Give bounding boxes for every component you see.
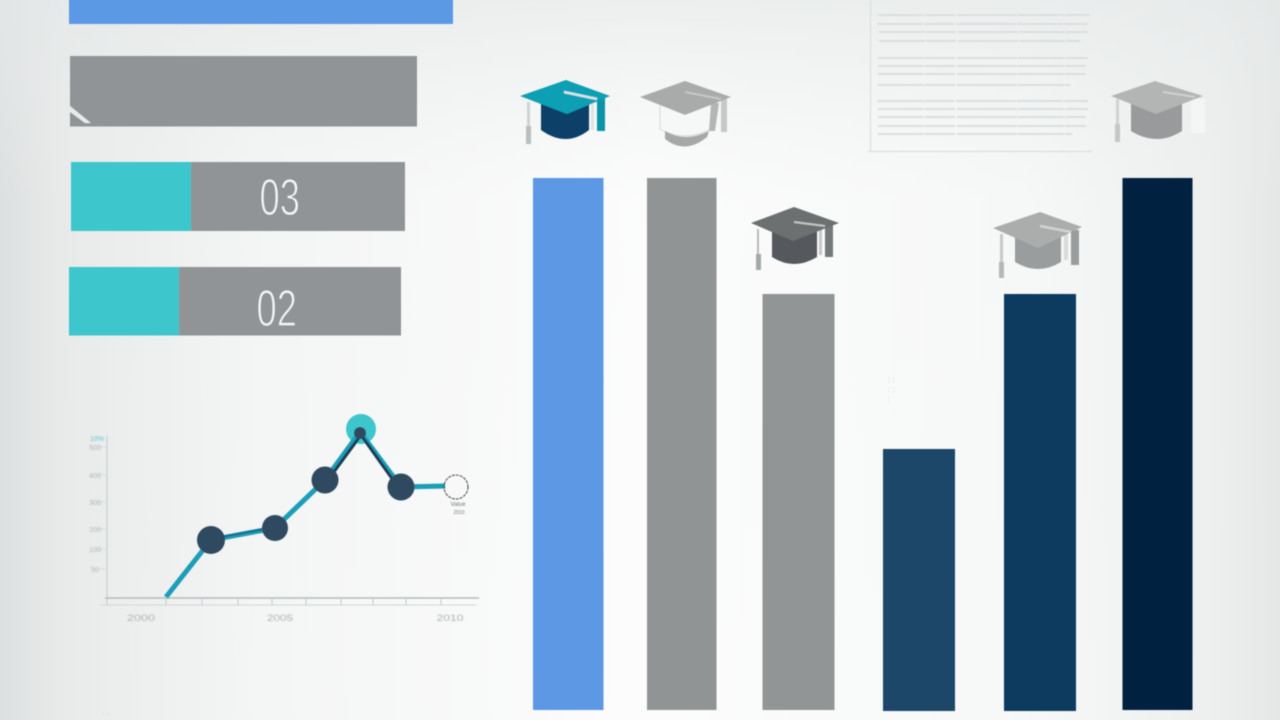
body copy lines: [877, 15, 1090, 134]
bar 02: 02: [256, 278, 297, 338]
trend line: [166, 432, 445, 597]
bar 03: [71, 162, 405, 231]
small faint marks: [102, 375, 895, 719]
bar 5: [1004, 294, 1076, 711]
end marker: 2010: [453, 510, 465, 516]
small faint marks: : :: [888, 375, 895, 384]
bar 6: [1122, 178, 1192, 710]
icon: graduation cap mid grey: [993, 212, 1082, 278]
axis labels: 200: [89, 527, 101, 534]
axis labels: 100: [89, 547, 101, 554]
small faint marks: · ·: [102, 710, 110, 719]
axis labels: 400: [89, 473, 101, 480]
axis labels: 500: [89, 445, 101, 452]
icon: graduation cap dark grey: [751, 207, 839, 270]
icon: graduation cap teal: [520, 80, 610, 144]
axis labels: 2005: [267, 613, 293, 623]
bar 2: [647, 178, 716, 710]
bar 02: [69, 267, 401, 338]
bar 4: [883, 449, 955, 711]
small faint marks: : :: [888, 385, 895, 394]
bar 03: 03: [260, 167, 300, 227]
axis labels: [89, 436, 464, 623]
end marker: Value: [451, 502, 466, 508]
grey bar: [70, 56, 417, 126]
icon: graduation cap pale grey: [1111, 81, 1205, 142]
panel: horizontal bars: [69, 0, 453, 338]
axis labels: 10%: [90, 436, 104, 443]
bar 3: [762, 294, 834, 710]
panel frame: [868, 0, 1092, 152]
axis labels: 2010: [436, 613, 464, 623]
chart axes: [98, 436, 479, 605]
line chart: [89, 414, 479, 623]
small faint marks: :: [888, 395, 890, 404]
axis labels: 50: [91, 567, 99, 574]
axis labels: 2000: [127, 613, 155, 623]
icon: graduation cap light grey with white body: [640, 81, 731, 147]
top blue bar: [69, 0, 453, 24]
end marker: [444, 475, 468, 516]
axis labels: 300: [89, 500, 101, 507]
peak highlight: [346, 414, 376, 444]
bar 1: [533, 178, 604, 710]
data points: [197, 427, 414, 554]
bar chart: [533, 178, 1192, 711]
panel: text block: [868, 0, 1092, 152]
